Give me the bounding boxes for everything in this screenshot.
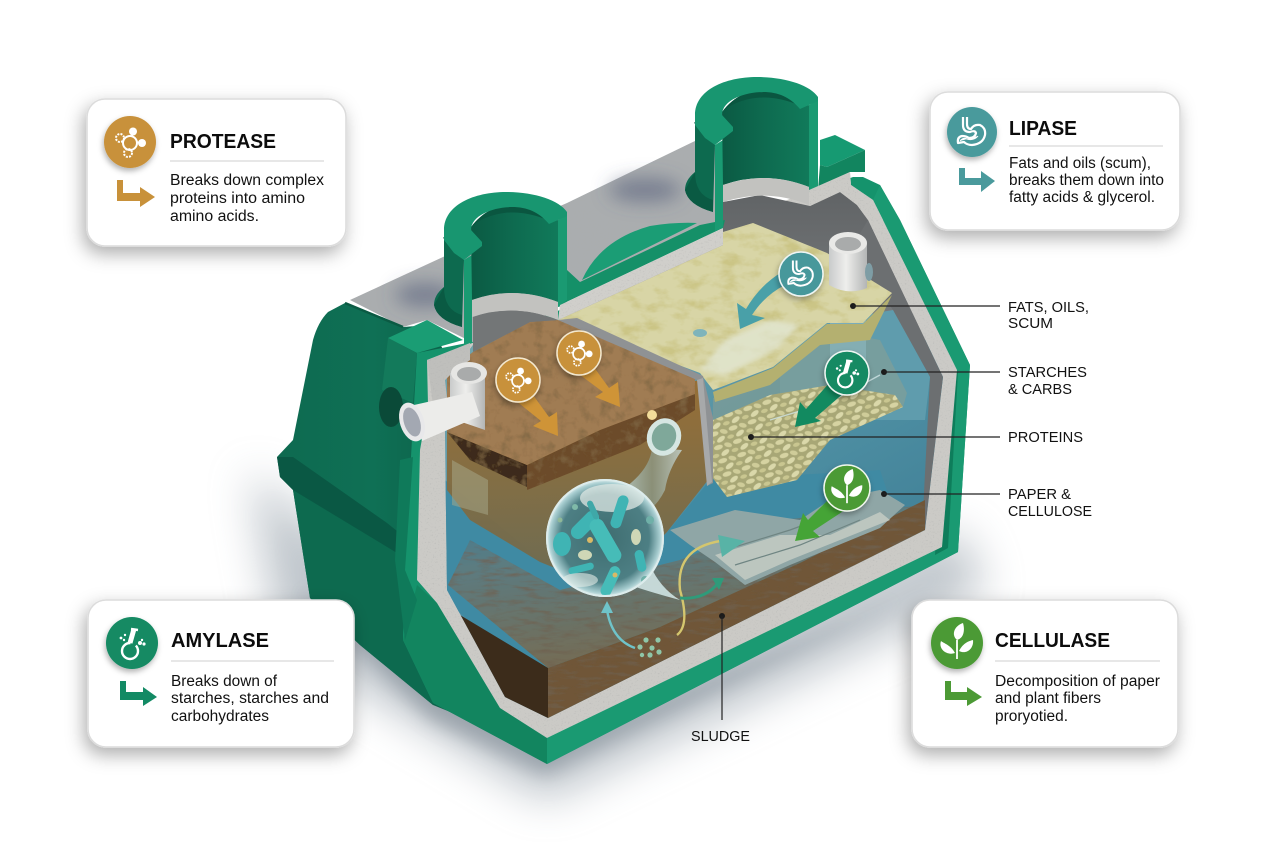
shoulder seam <box>345 303 403 327</box>
leader: starches <box>881 369 1000 375</box>
slab green <box>560 220 725 305</box>
arrow: cellulase <box>945 681 982 706</box>
heading: lipase: LIPASE <box>1009 117 1077 140</box>
right shoulder <box>818 135 865 190</box>
text: amylase: starches, starches and <box>171 690 329 707</box>
arrow: protease <box>117 180 155 207</box>
rim dark stripe <box>935 372 958 555</box>
label: starches and carbs: STARCHES <box>1008 365 1087 381</box>
scum layer top <box>558 223 892 390</box>
enzyme icon: lipase <box>779 252 823 296</box>
protein grains <box>712 385 903 497</box>
green base edge highlight <box>547 185 970 764</box>
water surface highlight <box>770 375 880 420</box>
panel: cellulase <box>912 600 1178 747</box>
left blue water <box>446 470 883 664</box>
left wall green darker band <box>395 457 417 640</box>
panel: lipase <box>930 92 1180 230</box>
bacteria <box>553 484 654 598</box>
riser 1 shape <box>434 192 567 346</box>
partition wall <box>558 318 713 486</box>
outlet pipe <box>829 232 873 291</box>
enzyme arrow: amylase <box>795 380 845 427</box>
deck shadows <box>395 178 681 307</box>
sludge front face <box>548 500 925 720</box>
text: amylase: carbohydrates <box>171 708 269 725</box>
riser 2 shape <box>685 77 818 231</box>
bead <box>647 410 657 420</box>
riser 1 concrete <box>472 293 558 320</box>
text: cellulase: proryotied. <box>995 708 1068 725</box>
text: cellulase: Decomposition of paper <box>995 673 1160 690</box>
panel: protease <box>87 99 346 246</box>
text: lipase: Fats and oils (scum), <box>1009 155 1151 172</box>
paper stack <box>670 490 905 585</box>
leader: paper <box>881 491 1000 497</box>
riser 2 <box>685 77 818 231</box>
neck <box>622 448 682 515</box>
slab concrete <box>558 228 723 320</box>
riser 1 <box>434 192 567 352</box>
heading: cellulase: CELLULASE <box>995 629 1110 652</box>
enzyme arrow: lipase <box>737 272 785 329</box>
tank top: concrete deck <box>350 140 720 342</box>
ground shadow <box>250 470 985 800</box>
inner right wall dark <box>868 220 943 528</box>
cut wall: green shell <box>403 177 970 764</box>
scum blue spot <box>693 329 707 337</box>
icon: cellulase <box>931 617 983 669</box>
label: proteins: PROTEINS <box>1008 430 1083 446</box>
concrete lintel <box>427 343 470 405</box>
shoulder concrete <box>809 172 883 220</box>
mouth <box>642 413 686 461</box>
enzyme arrow: cellulase <box>795 498 845 541</box>
text: lipase: breaks them down into <box>1009 172 1164 189</box>
arrow: amylase <box>120 681 157 706</box>
interior cavity <box>440 185 950 730</box>
sphere rim <box>547 480 663 596</box>
inlet pipe <box>394 362 487 445</box>
leader: proteins <box>748 434 1000 440</box>
heading: amylase: AMYLASE <box>171 629 269 652</box>
microbe bubble <box>546 410 686 600</box>
hole in body <box>379 387 403 427</box>
sludge left dark face <box>460 615 548 720</box>
enzyme icon: protease 2 <box>557 331 601 375</box>
icon: lipase <box>947 107 997 157</box>
tank body: left end <box>277 303 470 720</box>
enzyme arrow: protease 2 <box>568 352 620 407</box>
enzyme icon: amylase <box>825 351 869 395</box>
arrow: lipase <box>959 168 995 192</box>
green wedge top <box>388 320 463 353</box>
label: paper and cellulose: CELLULOSE <box>1008 504 1092 520</box>
soil block front <box>527 393 695 490</box>
septic tank <box>277 77 970 764</box>
heading: protease: PROTEASE <box>170 130 276 153</box>
riser 1 inner shade <box>473 311 558 352</box>
leader: fats <box>850 303 1000 309</box>
back wall <box>470 192 943 389</box>
cycle arrows <box>601 535 745 658</box>
scum layer shadow edge <box>713 295 892 402</box>
slab lid <box>582 223 697 280</box>
sphere <box>546 479 664 597</box>
panel: amylase <box>88 600 354 747</box>
icon: protease <box>104 116 156 168</box>
enzyme icon: cellulase <box>824 465 870 511</box>
scum pale patch <box>700 320 800 375</box>
text: protease: Breaks down complex <box>170 172 324 189</box>
protein layer <box>712 330 907 497</box>
green wedge front <box>382 338 417 403</box>
enzyme icon: protease 1 <box>496 358 540 402</box>
enzyme arrow: protease 1 <box>510 384 558 436</box>
text: protease: proteins into amino <box>170 190 305 207</box>
leader: sludge <box>719 613 725 720</box>
text: lipase: fatty acids & glycerol. <box>1009 189 1155 206</box>
label: fats, oils, scum: SCUM <box>1008 316 1053 332</box>
submerged pipe ghost left <box>452 460 488 515</box>
concrete shell <box>417 172 957 738</box>
label: sludge: SLUDGE <box>691 729 750 745</box>
sludge top surface <box>448 505 925 668</box>
submerged pipe ghost right <box>830 320 866 360</box>
icon: amylase <box>106 617 158 669</box>
text: cellulase: and plant fibers <box>995 690 1101 707</box>
text: protease: amino acids. <box>170 208 259 225</box>
label: paper and cellulose: PAPER & <box>1008 487 1071 503</box>
label: starches and carbs: & CARBS <box>1008 382 1072 398</box>
water body <box>440 340 950 730</box>
tail <box>630 565 680 600</box>
label: fats, oils, scum: FATS, OILS, <box>1008 300 1089 316</box>
flange shadow <box>277 457 402 553</box>
riser 2 concrete <box>723 178 809 205</box>
soil block top <box>447 320 695 465</box>
soil block dark face <box>447 432 527 487</box>
body lower band <box>293 490 433 705</box>
text: amylase: Breaks down of <box>171 673 278 690</box>
right water upper <box>806 310 930 420</box>
lower wedge <box>403 585 547 764</box>
brown water column <box>447 380 706 568</box>
